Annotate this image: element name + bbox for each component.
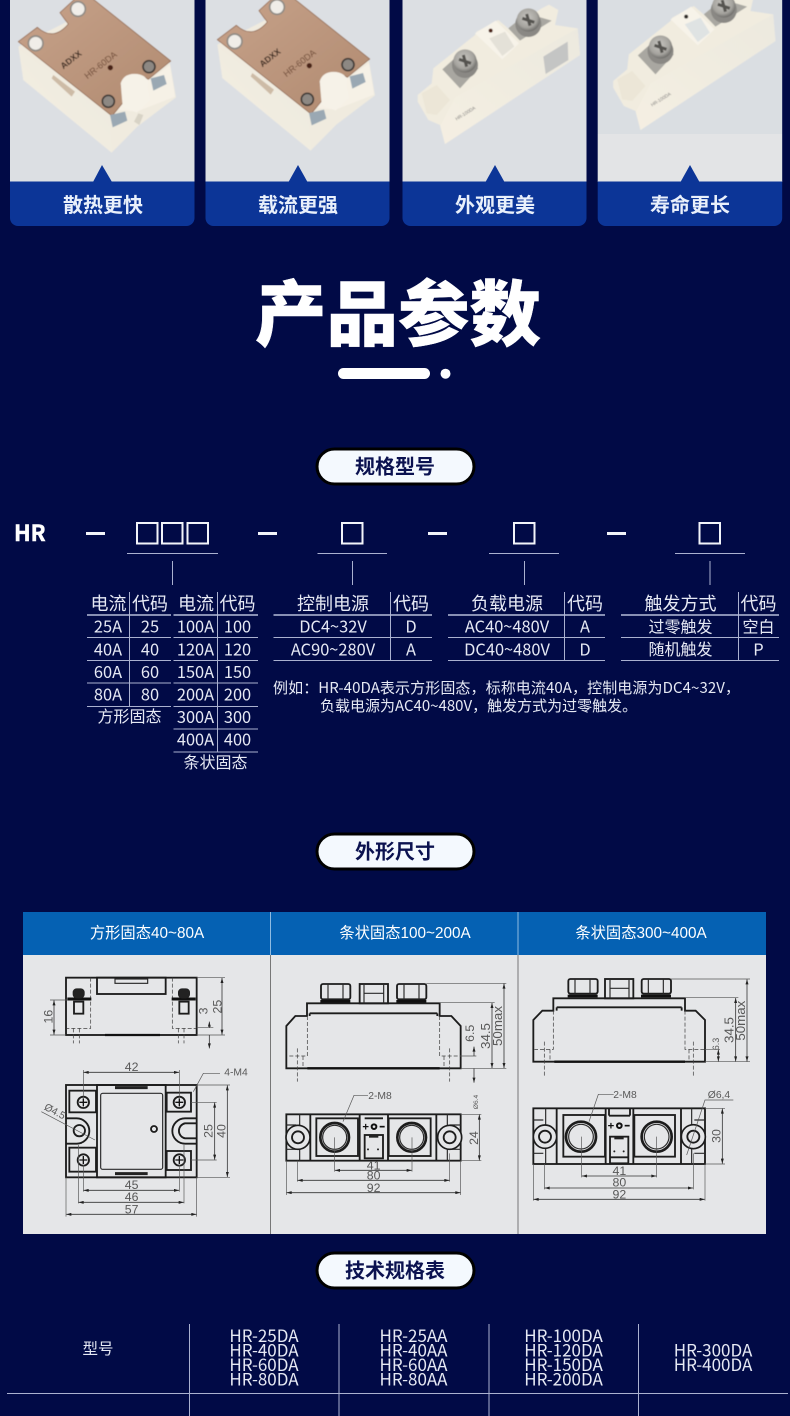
example note: 例如：HR-40DA表示方形固态，标称电流40A，控制电源为DC4~32V，	[273, 677, 740, 698]
photo: square solid state relay	[217, 0, 375, 151]
plan view: 41	[367, 1158, 381, 1172]
label: HR prefix: HR	[14, 516, 46, 548]
table: square relay current codes: 80	[141, 682, 159, 706]
side view: 50max	[490, 1006, 505, 1046]
plan view: 57	[125, 1203, 139, 1217]
plan view: 2-M8	[613, 1090, 637, 1101]
column: HR-xxAA: HR-60AA	[380, 1351, 448, 1376]
column header: 条状固态300~400A: 条状固态300~400A	[575, 925, 707, 942]
plan view: 41	[612, 1164, 626, 1178]
plan view: 92	[612, 1187, 626, 1201]
plan view: +	[608, 1121, 615, 1133]
plan view: 80	[612, 1176, 626, 1190]
table: control power: DC4~32V	[299, 614, 367, 638]
model code row	[14, 516, 745, 585]
drawing: bar module 300~400A	[533, 979, 750, 1201]
table: load power: 代码	[567, 590, 603, 616]
table: control power: 代码	[393, 590, 429, 616]
label bar	[10, 182, 194, 226]
plan view: +	[362, 1121, 369, 1133]
column header: 方形固态40~80A: 方形固态40~80A	[90, 925, 205, 942]
side view: 25	[210, 1000, 224, 1014]
column: HR-300~400DA: HR-300DA	[674, 1336, 753, 1362]
table: bar module current codes: 300	[224, 704, 251, 728]
heading pill: 技术规格表	[317, 1253, 474, 1288]
connector lines	[127, 554, 745, 585]
column header: 条状固态100~200A: 条状固态100~200A	[339, 925, 471, 942]
table: square relay current codes: 25	[141, 614, 159, 638]
plan view: 45	[125, 1178, 139, 1192]
column: HR-xxDA: HR-40DA	[229, 1336, 299, 1362]
table: bar module current codes: 电流	[178, 590, 214, 616]
plan view	[533, 1090, 733, 1201]
plan view: Ø6.4	[473, 1094, 480, 1109]
table: square relay current codes: 代码	[132, 590, 168, 616]
table: trigger mode: 触发方式	[644, 590, 716, 616]
title underline	[338, 368, 450, 379]
heading pill: 规格型号	[317, 449, 474, 484]
triangle pointer	[486, 165, 504, 182]
table: square relay current codes: 60	[141, 659, 159, 683]
table: trigger mode: 代码	[740, 590, 776, 616]
icon: right terminal screw	[704, 0, 747, 27]
table: load power: D	[579, 636, 591, 660]
panel: card 寿命更长	[598, 0, 782, 226]
label: printed model: HR-60DA	[281, 47, 318, 79]
icon: terminal screws	[227, 0, 366, 125]
plan view: 2-M8	[368, 1091, 392, 1102]
side view: 3	[197, 1007, 211, 1014]
heading pill: 外形尺寸: 外形尺寸	[355, 836, 435, 864]
table: square relay current codes: 40A	[94, 636, 122, 660]
example note: 负载电源为AC40~480V，触发方式为过零触发。	[320, 695, 637, 716]
column: HR-xxDA	[229, 1322, 299, 1390]
column: HR-100~200DA: HR-100DA	[524, 1322, 603, 1347]
table: trigger mode: 过零触发	[648, 614, 713, 638]
table: trigger mode: P	[753, 636, 764, 660]
table: bar module current codes: 120	[224, 636, 251, 660]
drawing: square relay 40~80A	[41, 978, 248, 1217]
side view: 16	[42, 1010, 56, 1024]
plan view: 30	[709, 1129, 723, 1143]
table: bar module current codes: 100A	[177, 614, 214, 638]
column: HR-100~200DA: HR-200DA	[524, 1366, 603, 1390]
table: square relay current codes	[87, 590, 171, 727]
label bar	[598, 182, 782, 226]
triangle pointer	[288, 165, 308, 182]
icon: left terminal screw	[638, 35, 674, 74]
triangle pointer	[680, 165, 700, 182]
side view: 34.5	[722, 1017, 737, 1043]
table: load power: A	[580, 614, 590, 638]
table: bar module current codes: 150	[224, 659, 251, 683]
table: square relay current codes: 80A	[94, 682, 122, 706]
table: bar module current codes: 100	[224, 614, 251, 638]
plan view: 25	[202, 1124, 216, 1138]
table: bar module current codes: 400A	[177, 726, 214, 750]
drawing: bar module 100~200A	[286, 983, 506, 1195]
table: load power: DC40~480V	[464, 636, 550, 660]
plan view: 24	[467, 1131, 481, 1145]
column: HR-xxDA: HR-80DA	[229, 1366, 299, 1390]
plan view: 42	[125, 1060, 139, 1074]
table: load power	[448, 590, 605, 660]
plan view: 80	[367, 1169, 381, 1183]
label: 载流更强: 载流更强	[258, 189, 338, 218]
plan view	[286, 1091, 481, 1195]
table: control power: AC90~280V	[291, 636, 376, 660]
plan view: 4-M4	[224, 1068, 248, 1079]
label: printed brand: HR-100DA	[650, 91, 673, 108]
heading pill: 外形尺寸	[317, 834, 474, 869]
panel: card 载流更强	[206, 0, 390, 226]
label bar	[206, 182, 390, 226]
table: bar module current codes: 400	[224, 726, 251, 750]
table: load power: AC40~480V	[465, 614, 550, 638]
table: control power	[274, 590, 432, 660]
row label: 型号: 型号	[82, 1337, 114, 1359]
table: square relay current codes: 电流	[90, 590, 126, 616]
column: HR-100~200DA: HR-120DA	[524, 1336, 603, 1362]
plan view: Ø6,4	[708, 1090, 730, 1101]
table: load power: 负载电源	[471, 590, 543, 616]
label: 外观更美: 外观更美	[455, 189, 535, 218]
photo: bar solid state module	[418, 5, 580, 144]
plan view: 92	[367, 1181, 381, 1195]
column: HR-100~200DA	[524, 1322, 603, 1390]
panel: card 散热更快	[10, 0, 194, 226]
panel: card 外观更美	[402, 0, 586, 226]
table: bar module current codes: 条状固态	[183, 749, 248, 773]
side view: 50max	[733, 1000, 748, 1041]
table: bar module current codes: 300A	[177, 704, 214, 728]
table: bar module current codes: 代码	[220, 590, 256, 616]
label: 散热更快: 散热更快	[63, 189, 143, 218]
plan view: Ø4.5	[42, 1102, 67, 1122]
column: HR-300~400DA: HR-400DA	[674, 1351, 753, 1376]
label: 寿命更长: 寿命更长	[650, 189, 730, 218]
table: trigger mode: 随机触发	[648, 636, 713, 660]
table: bar module current codes: 150A	[177, 659, 214, 683]
label: printed brand: HR-100DA	[455, 105, 477, 122]
column: HR-100~200DA: HR-150DA	[524, 1351, 603, 1376]
table: square relay current codes: 25A	[94, 614, 122, 638]
table: trigger mode: 空白	[742, 614, 775, 638]
photo: bar solid state module	[613, 0, 775, 130]
table: square relay current codes: 方形固态	[97, 703, 162, 727]
panel: dimension drawings	[23, 912, 766, 1234]
photo: square solid state relay: ADXX	[58, 48, 84, 71]
table: control power: D	[405, 614, 417, 638]
table: trigger mode	[621, 590, 779, 660]
side view: 6.5	[463, 1025, 477, 1042]
icon: left terminal screw	[442, 49, 478, 88]
side view	[286, 983, 506, 1083]
column: HR-xxAA: HR-40AA	[380, 1336, 448, 1362]
heading pill: 技术规格表: 技术规格表	[345, 1254, 445, 1284]
spec table	[7, 1322, 788, 1416]
plan view	[41, 1060, 248, 1217]
column: HR-xxAA: HR-25AA	[380, 1322, 448, 1347]
label bar	[402, 182, 586, 226]
plan view: 46	[125, 1190, 139, 1204]
photo: square solid state relay: ADXX	[257, 46, 283, 69]
side view	[42, 978, 225, 1048]
column: HR-300~400DA	[674, 1336, 753, 1376]
table: bar module current codes: 200A	[177, 682, 214, 706]
example note	[273, 677, 740, 716]
table: control power: A	[406, 636, 416, 660]
table: square relay current codes: 40	[141, 636, 159, 660]
table: bar module current codes: 200	[224, 682, 251, 706]
side view: 6.3	[711, 1038, 721, 1050]
dash separators	[86, 532, 626, 535]
side view: 34.5	[478, 1023, 493, 1049]
table: control power: 控制电源	[297, 590, 369, 616]
table: bar module current codes	[174, 590, 258, 773]
heading pill: 规格型号: 规格型号	[355, 450, 435, 480]
table: bar module current codes: 120A	[177, 636, 214, 660]
photo: square solid state relay	[18, 0, 176, 153]
column: HR-xxDA: HR-60DA	[229, 1351, 299, 1376]
code boxes	[137, 523, 720, 544]
plan view: 40	[214, 1124, 228, 1138]
icon: terminal screws	[28, 2, 167, 127]
side view	[533, 979, 750, 1076]
table: square relay current codes: 60A	[94, 659, 122, 683]
icon: right terminal screw	[508, 8, 552, 41]
column: HR-xxAA: HR-80AA	[380, 1366, 448, 1390]
triangle pointer	[93, 165, 112, 182]
label: printed model: HR-60DA	[82, 49, 119, 81]
title: 产品参数	[255, 257, 541, 361]
column: HR-xxDA: HR-25DA	[229, 1322, 299, 1347]
column: HR-xxAA	[380, 1322, 448, 1390]
